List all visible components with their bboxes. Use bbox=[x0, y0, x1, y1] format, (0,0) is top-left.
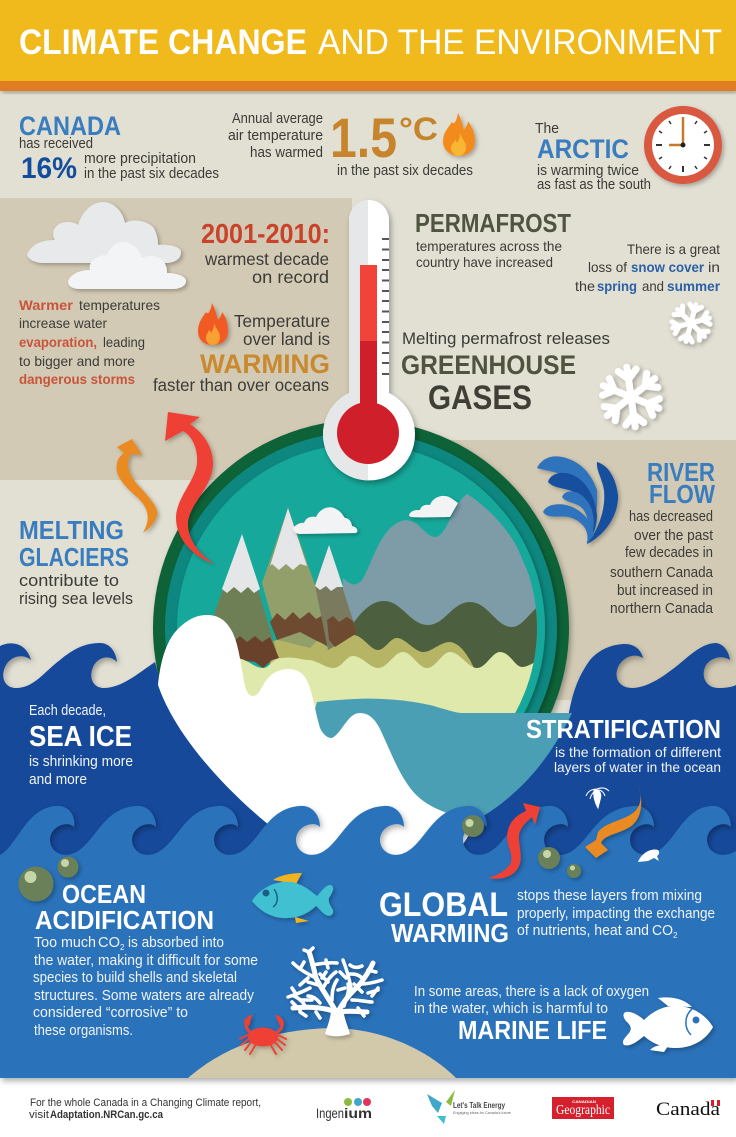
text: global warming: WARMING bbox=[391, 918, 509, 948]
text: stratification: STRATIFICATION bbox=[526, 714, 721, 744]
text: snow cover: loss of bbox=[588, 259, 627, 275]
logo: Let's Talk Energy bbox=[427, 1090, 512, 1124]
water in lower circle bbox=[300, 699, 572, 830]
icon: krill bbox=[586, 788, 609, 808]
text: Arctic warming bbox=[535, 121, 651, 193]
text: marine life: In some areas, there is a lack of oxygen bbox=[414, 984, 649, 1000]
logo: Ingenium bbox=[316, 1098, 372, 1121]
text: ocean acidification: considered “corrosive” to bbox=[33, 1005, 188, 1021]
text: ocean acidification bbox=[33, 879, 258, 1039]
text: ocean acidification: CO bbox=[98, 935, 120, 951]
text: melting glaciers: rising sea levels bbox=[19, 589, 133, 608]
text: warmer temperatures: dangerous storms bbox=[19, 371, 135, 387]
light green meadow bbox=[240, 652, 534, 713]
text: warmer temperatures: temperatures bbox=[79, 297, 160, 313]
arrow: orange lower bbox=[585, 785, 641, 858]
bubbles bbox=[18, 815, 581, 902]
text: river flow: but increased in bbox=[617, 583, 713, 599]
text: 2001-2010 warmest decade: warmest decade bbox=[204, 249, 329, 269]
text: ocean acidification: ACIDIFICATION bbox=[35, 905, 214, 935]
text: sea ice bbox=[29, 703, 133, 788]
grey mountain bbox=[343, 494, 540, 680]
text: snow cover bbox=[575, 241, 721, 294]
icon: river splash bbox=[537, 456, 618, 544]
text: temperature over land bbox=[153, 311, 330, 395]
text: river flow: southern Canada bbox=[610, 565, 714, 581]
text: sea ice: SEA ICE bbox=[29, 721, 132, 753]
footer report text: For the whole Canada in a Changing Climate report, bbox=[30, 1097, 261, 1109]
logo: Canada wordmark: Canada bbox=[656, 1099, 721, 1120]
text: temperature over land: faster than over oceans bbox=[153, 375, 329, 395]
clouds in circle bbox=[293, 496, 458, 534]
text: Arctic warming: as fast as the south bbox=[537, 177, 651, 193]
icon: clock bbox=[644, 106, 722, 184]
text: melting glaciers bbox=[19, 515, 133, 608]
text: ocean acidification: Too much bbox=[34, 935, 96, 951]
text: temperature over land: Temperature bbox=[234, 311, 330, 331]
left peak bbox=[214, 534, 277, 653]
text: river flow: northern Canada bbox=[610, 601, 714, 617]
text: snow cover: the bbox=[575, 278, 595, 294]
circular landscape bbox=[152, 423, 574, 713]
text: snow cover: spring bbox=[597, 278, 637, 294]
header banner bbox=[0, 0, 736, 91]
text: 1.5 degrees warming bbox=[228, 106, 473, 179]
icon: flame orange bbox=[443, 113, 475, 156]
text: 1.5 degrees warming: has warmed bbox=[250, 145, 323, 161]
text: permafrost bbox=[415, 208, 571, 270]
text: river flow: few decades in bbox=[625, 545, 713, 561]
text: melting permafrost greenhouse gases bbox=[401, 329, 610, 417]
text: Canada precipitation: CANADA bbox=[19, 111, 121, 141]
text: warmer temperatures: to bigger and more bbox=[19, 353, 135, 369]
text: melting permafrost greenhouse gases: GREENHOUSE bbox=[401, 350, 576, 380]
icon: crab bbox=[240, 1015, 286, 1054]
text: global warming: CO bbox=[652, 923, 673, 939]
text: marine life: MARINE LIFE bbox=[458, 1015, 607, 1045]
icon: small snowflake bbox=[667, 300, 715, 346]
text: Canada precipitation: in the past six decades bbox=[84, 166, 219, 182]
footer report text: visit bbox=[29, 1109, 49, 1121]
text: Arctic warming: The bbox=[535, 121, 559, 137]
text: ocean acidification: OCEAN bbox=[62, 879, 146, 909]
title: AND THE ENVIRONMENT bbox=[318, 23, 722, 62]
icon: coral bbox=[288, 948, 382, 1036]
text: river flow: has decreased bbox=[629, 509, 713, 525]
text: river flow: RIVER bbox=[647, 457, 715, 487]
text: snow cover: in bbox=[708, 259, 720, 275]
text: 1.5 degrees warming: air temperature bbox=[228, 128, 323, 144]
icon: clouds bbox=[27, 202, 186, 289]
text: warmer temperatures: increase water bbox=[19, 315, 107, 331]
logo: Canadian Geographic: Geographic bbox=[556, 1103, 610, 1118]
icon: seabed sand bbox=[188, 1028, 456, 1078]
text: stratification: is the formation of different bbox=[555, 744, 721, 760]
arrow: orange rising bbox=[116, 439, 157, 533]
text: 1.5 degrees warming: °C bbox=[399, 111, 438, 147]
logo: Ingenium: ium bbox=[344, 1105, 372, 1121]
text: stratification: layers of water in the ocean bbox=[554, 759, 721, 775]
middle peak bbox=[262, 508, 322, 648]
logo: Let's Talk Energy: Let's Talk Energy bbox=[453, 1100, 505, 1110]
text: ocean acidification: is absorbed into bbox=[128, 935, 224, 951]
text: Arctic warming: ARCTIC bbox=[537, 134, 629, 164]
landscape layers bbox=[205, 494, 540, 720]
front ocean wave bbox=[0, 806, 736, 1078]
title: CLIMATE CHANGE bbox=[19, 23, 307, 62]
dark blue sea with waves bbox=[0, 643, 736, 900]
text: marine life bbox=[414, 984, 649, 1045]
logo: Ingenium: Ingen bbox=[316, 1105, 344, 1121]
arrow: red rising bbox=[165, 412, 215, 564]
text: sea ice: and more bbox=[29, 772, 87, 788]
text: Canada precipitation: more precipitation bbox=[84, 151, 196, 167]
text: ocean acidification: the water, making it difficult for some bbox=[34, 953, 258, 969]
text: melting glaciers: GLACIERS bbox=[19, 542, 129, 572]
text: melting glaciers: contribute to bbox=[19, 571, 119, 590]
text: global warming: properly, impacting the exchange bbox=[517, 906, 715, 922]
text: snow cover: summer bbox=[667, 278, 721, 294]
footer bbox=[29, 1090, 721, 1124]
text: global warming: stops these layers from mixing bbox=[517, 888, 702, 904]
text: global warming bbox=[379, 886, 715, 948]
text: 1.5 degrees warming: in the past six decades bbox=[337, 163, 473, 179]
text: marine life: in the water, which is harmful to bbox=[414, 1001, 608, 1017]
text: 1.5 degrees warming: Annual average bbox=[232, 111, 323, 127]
text: global warming: of nutrients, heat and bbox=[517, 923, 649, 939]
text: Arctic warming: is warming twice bbox=[537, 163, 639, 179]
text: 2001-2010 warmest decade bbox=[201, 218, 330, 287]
text: ocean acidification: species to build shells and skeletal bbox=[33, 970, 237, 986]
text: global warming: GLOBAL bbox=[379, 886, 508, 924]
text: melting glaciers: MELTING bbox=[19, 515, 124, 545]
logo: Let's Talk Energy: Engaging ideas for Canada's future bbox=[453, 1110, 512, 1115]
icon: flame red bbox=[198, 303, 228, 345]
text: 2001-2010 warmest decade: 2001-2010: bbox=[201, 218, 330, 249]
text: warmer temperatures: evaporation, bbox=[19, 334, 97, 350]
text: snow cover: snow cover bbox=[631, 259, 705, 275]
thermometer bbox=[323, 200, 415, 480]
logo: Canadian Geographic: CANADIAN bbox=[572, 1099, 596, 1104]
icon: white fish bbox=[623, 997, 713, 1052]
text: melting permafrost greenhouse gases: Melting permafrost releases bbox=[402, 329, 610, 348]
text: Canada precipitation: 16% bbox=[21, 152, 77, 185]
icon: white sea creature bbox=[638, 850, 659, 862]
footer report text bbox=[29, 1097, 261, 1121]
text: global warming: 2 bbox=[673, 931, 678, 940]
text: temperature over land: WARMING bbox=[200, 349, 330, 379]
text: permafrost: temperatures across the bbox=[416, 238, 562, 254]
text: sea ice: is shrinking more bbox=[29, 754, 133, 770]
text: 1.5 degrees warming: 1.5 bbox=[330, 106, 397, 169]
text: river flow: FLOW bbox=[649, 479, 715, 509]
text: permafrost: PERMAFROST bbox=[415, 208, 571, 238]
text: ocean acidification: structures. Some waters are already bbox=[34, 988, 255, 1004]
text: river flow bbox=[610, 457, 715, 617]
olive band bbox=[270, 635, 474, 668]
text: ocean acidification: 2 bbox=[120, 943, 125, 952]
text: Canada precipitation bbox=[19, 111, 219, 185]
dark green hills bbox=[350, 601, 540, 700]
icon: large snowflake bbox=[597, 363, 665, 431]
logo: Canadian Geographic bbox=[552, 1097, 614, 1119]
text: 2001-2010 warmest decade: on record bbox=[252, 267, 329, 287]
text: permafrost: country have increased bbox=[416, 254, 553, 270]
text: sea ice: Each decade, bbox=[29, 703, 106, 719]
footer report text: Adaptation.NRCan.gc.ca bbox=[50, 1109, 164, 1121]
text: temperature over land: over land is bbox=[243, 329, 330, 349]
text: warmer temperatures: Warmer bbox=[19, 297, 74, 313]
text: river flow: over the past bbox=[634, 528, 713, 544]
text: ocean acidification: these organisms. bbox=[34, 1023, 133, 1039]
text: snow cover: and bbox=[642, 278, 664, 294]
text: warmer temperatures bbox=[19, 297, 160, 387]
text: stratification bbox=[526, 714, 721, 775]
text: melting permafrost greenhouse gases: GASES bbox=[428, 379, 532, 417]
text: warmer temperatures: leading bbox=[103, 334, 145, 350]
text: Canada precipitation: has received bbox=[19, 136, 93, 152]
icon: teal fish bbox=[252, 873, 333, 923]
text: snow cover: There is a great bbox=[627, 241, 720, 257]
glacier bbox=[158, 615, 480, 880]
right peak bbox=[315, 545, 357, 650]
arrow: red lower bbox=[488, 803, 540, 879]
